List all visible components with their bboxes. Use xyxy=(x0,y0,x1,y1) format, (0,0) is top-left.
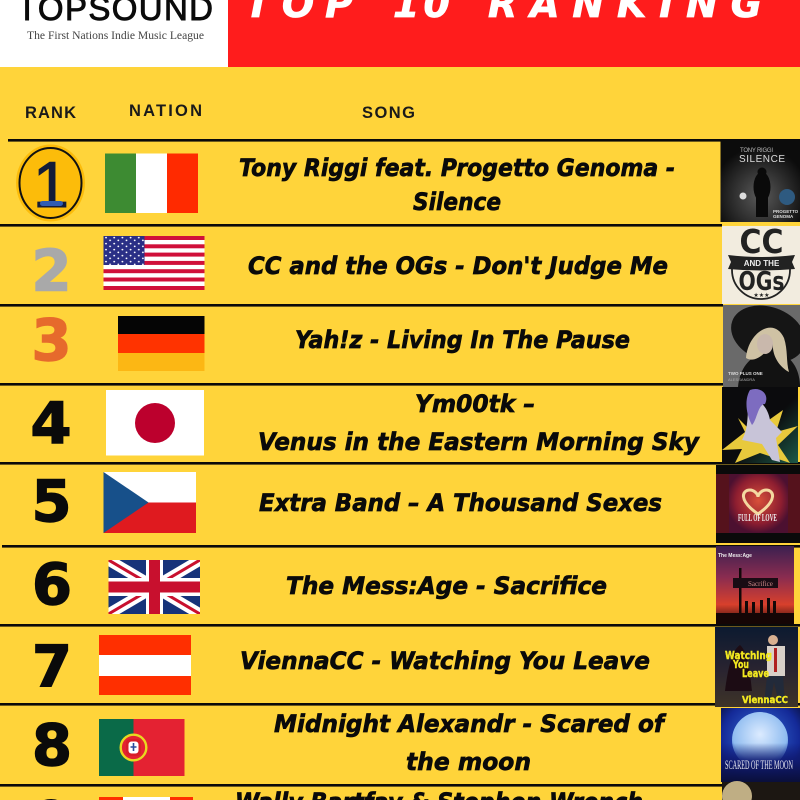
song: rank 4: Ym00tk – xyxy=(415,390,535,418)
flag: Germany xyxy=(118,316,204,371)
rank 5: 5 xyxy=(32,469,72,535)
cover: Sacrifice: Sacrifice xyxy=(748,580,773,588)
cover: Silence xyxy=(720,140,800,222)
song: rank 8: Midnight Alexandr - Scared of xyxy=(274,710,666,738)
rank 2: 2 xyxy=(32,238,72,304)
column headings xyxy=(25,102,415,122)
song: rank 5: Extra Band – A Thousand Sexes xyxy=(259,489,662,517)
rank 6: 6 xyxy=(32,552,72,618)
cover: Living In The Pause xyxy=(723,305,800,387)
cover: Silence: TONY RIGGI xyxy=(740,148,773,154)
cover: Watching You Leave: ViennaCC xyxy=(742,695,788,706)
rank 3: 3 xyxy=(32,308,72,374)
song: rank 4: Venus in the Eastern Morning Sky xyxy=(258,428,700,456)
flag: row 9 xyxy=(99,797,193,800)
cover: Watching You Leave: Watching xyxy=(725,649,772,662)
song: rank 6: The Mess:Age - Sacrifice xyxy=(286,572,607,600)
cover: Full of Love xyxy=(716,465,800,543)
cover: rank 9 xyxy=(722,781,800,800)
song: rank 8 xyxy=(274,710,666,776)
song: rank 1: Tony Riggi feat. Progetto Genoma - xyxy=(239,154,675,182)
flag: Italy xyxy=(105,154,198,213)
cover: Silence: PROGETTO xyxy=(773,209,799,214)
heading: nation: NATION xyxy=(129,102,202,120)
song: rank 3: Yah!z - Living In The Pause xyxy=(295,326,630,354)
cover: CC and the OGs: OGs xyxy=(738,267,784,297)
song: rank 7: ViennaCC - Watching You Leave xyxy=(240,647,650,675)
cover: Silence: SILENCE xyxy=(739,154,785,165)
cover: CC and the OGs xyxy=(722,222,800,304)
cover: Living In The Pause: ALESSANDRA xyxy=(728,377,755,382)
cover: Venus in the Eastern Morning Sky xyxy=(722,387,798,463)
cover: CC and the OGs: CC xyxy=(740,222,784,261)
heading: rank: RANK xyxy=(25,104,76,122)
cover: CC and the OGs: AND THE xyxy=(744,259,780,268)
rank 7: 7 xyxy=(32,634,72,700)
cover: CC and the OGs: ★★★ xyxy=(753,292,770,299)
cover: Watching You Leave: You xyxy=(732,658,749,671)
song: rank 1 xyxy=(239,154,675,216)
header: logo panel xyxy=(0,0,228,67)
cover: Sacrifice xyxy=(716,546,794,624)
song: rank 4 xyxy=(258,390,700,456)
flag: Japan xyxy=(106,390,204,456)
rank 4: 4 xyxy=(30,391,72,457)
cover: Living In The Pause: TWO PLUS ONE xyxy=(728,371,763,376)
song: rank 2: CC and the OGs - Don't Judge Me xyxy=(248,252,668,280)
cover: Scared of the Moon xyxy=(721,708,800,782)
cover: Watching You Leave xyxy=(715,627,798,707)
cover: Sacrifice: The Mess:Age xyxy=(718,553,752,559)
cover: Watching You Leave: Leave xyxy=(742,667,769,680)
song: rank 8: the moon xyxy=(406,748,531,776)
rank 1 badge xyxy=(16,144,85,222)
logo tagline: The First Nations Indie Music League xyxy=(27,28,204,42)
flag: Austria xyxy=(99,635,191,695)
heading: song: SONG xyxy=(362,104,415,122)
flag: Portugal xyxy=(99,719,184,776)
rank 8: 8 xyxy=(32,713,72,779)
cover: Silence: GENOMA xyxy=(773,214,794,219)
title xyxy=(245,0,762,26)
flag: United Kingdom xyxy=(108,560,200,614)
song: rank 1: Silence xyxy=(413,188,501,216)
flag: USA xyxy=(104,236,204,290)
header: red title panel xyxy=(228,0,800,67)
rank 1 badge: 1 xyxy=(33,148,69,221)
flag: Czech Republic xyxy=(104,472,196,533)
